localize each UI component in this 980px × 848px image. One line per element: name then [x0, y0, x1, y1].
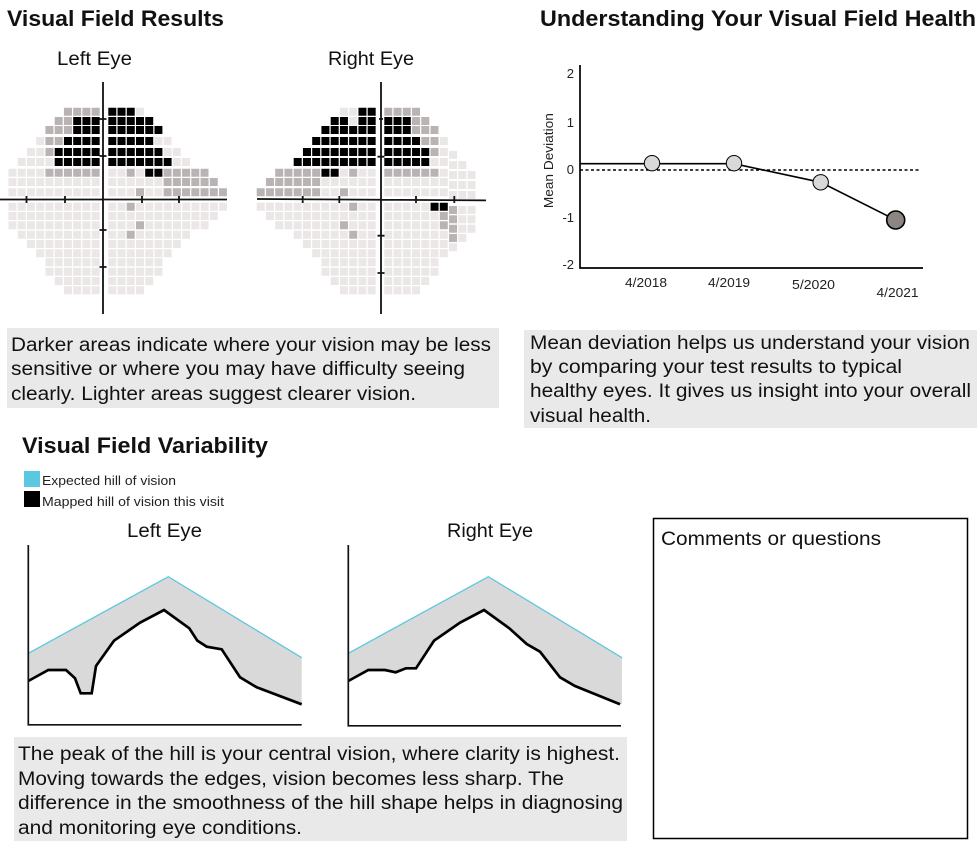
text block: mean deviation explanation: healthy eyes. It gives us insight into your overall [530, 381, 971, 402]
text block: visual field explanation: Darker areas indicate where your vision may be less [11, 335, 491, 356]
legend [24, 471, 224, 509]
text block: mean deviation explanation [524, 330, 977, 428]
y axis ticks: 0 [567, 162, 574, 177]
chart: right eye hill of vision [348, 545, 622, 726]
data points [644, 156, 905, 229]
chart: mean deviation line chart [541, 65, 923, 300]
y axis ticks: -1 [562, 210, 574, 225]
y axis ticks: 1 [567, 115, 574, 130]
legend: Mapped hill of vision this visit [42, 494, 224, 509]
y axis ticks [562, 66, 574, 272]
title: Understanding Your Visual Field Health: Understanding Your Visual Field Health [540, 6, 976, 31]
text block: visual field explanation: clearly. Lighter areas suggest clearer vision. [11, 384, 416, 405]
legend: Expected hill of vision [42, 473, 176, 488]
chart: left eye hill of vision [28, 545, 302, 725]
text block: hill of vision explanation: The peak of the hill is your central vision, where clarity is highest. [18, 744, 620, 765]
title: Visual Field Variability: Visual Field Variability [22, 433, 269, 458]
label: left eye field: Left Eye [57, 49, 132, 70]
text block: mean deviation explanation: Mean deviation helps us understand your vision [530, 333, 970, 354]
x axis dates: 5/2020 [792, 277, 835, 292]
x axis dates: 4/2019 [708, 275, 750, 290]
text block: mean deviation explanation: visual health. [530, 406, 651, 427]
text block: visual field explanation: sensitive or where you may have difficulty seeing [11, 359, 465, 380]
y axis ticks: 2 [567, 66, 574, 81]
x axis dates: 4/2021 [876, 285, 918, 300]
chart: right eye visual field grid [257, 82, 486, 314]
chart: left eye visual field grid [0, 82, 227, 314]
panel: comments or questions [654, 518, 968, 838]
text block: visual field explanation [7, 328, 499, 408]
text block: hill of vision explanation: difference in the smoothness of the hill shape helps in diagnosing [18, 793, 623, 814]
label: left eye hill: Left Eye [127, 521, 202, 542]
text block: mean deviation explanation: by comparing your test results to typical [530, 357, 902, 378]
label: right eye hill: Right Eye [447, 521, 533, 542]
y axis label: Mean Deviation [541, 113, 556, 208]
x axis dates [625, 275, 918, 300]
text block: hill of vision explanation: Moving towards the edges, vision becomes less sharp. The [18, 769, 564, 790]
title: Visual Field Results: Visual Field Results [7, 6, 224, 31]
label: right eye field: Right Eye [328, 49, 414, 70]
y axis ticks: -2 [562, 257, 574, 272]
text block: hill of vision explanation: and monitoring eye conditions. [18, 818, 302, 839]
text block: hill of vision explanation [14, 737, 627, 841]
panel: comments or questions: Comments or questions [661, 529, 881, 550]
x axis dates: 4/2018 [625, 275, 667, 290]
